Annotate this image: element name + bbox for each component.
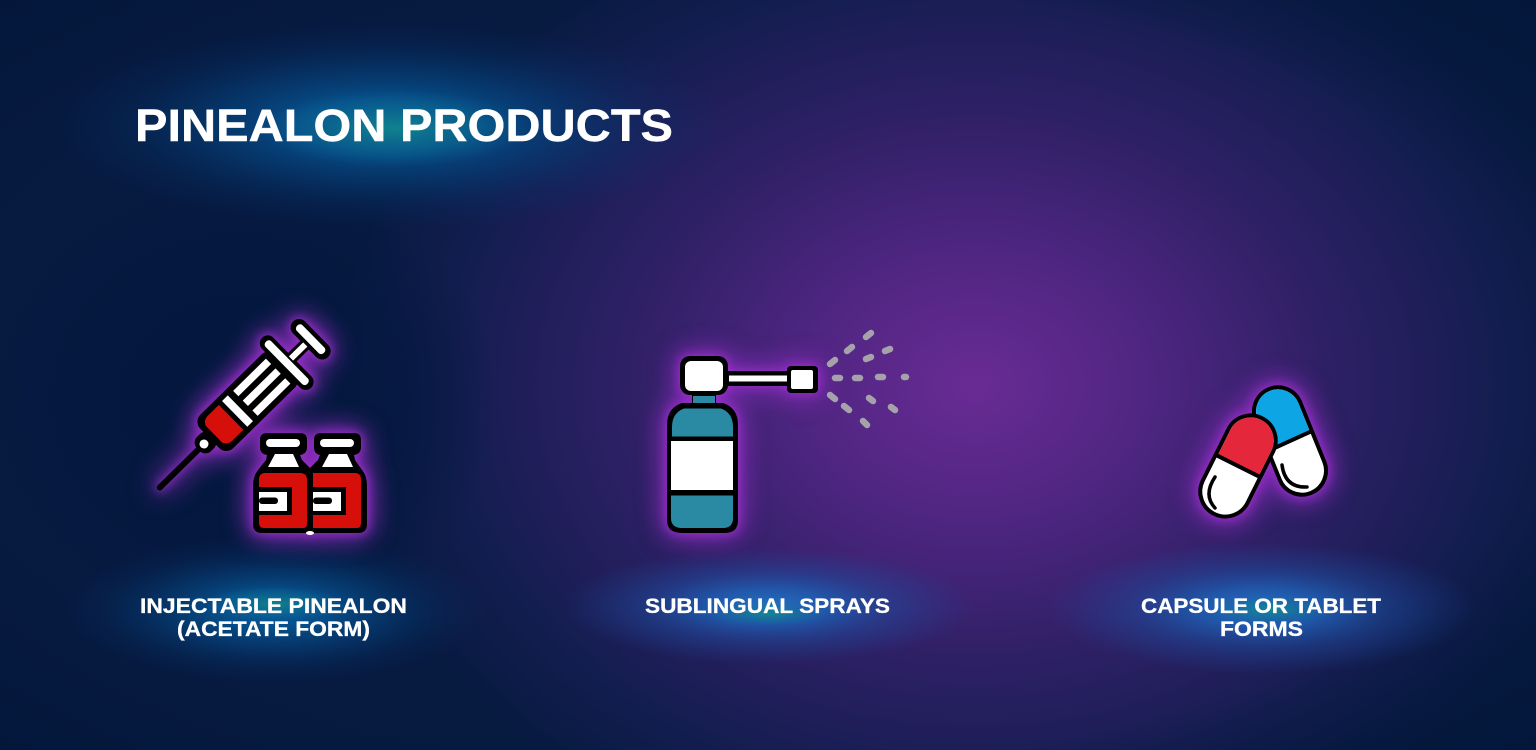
label: injectable pinealon — [140, 595, 407, 641]
label glow: sprays — [563, 548, 973, 664]
icon: syringe and vials — [135, 308, 367, 535]
spray bottle body — [667, 392, 738, 533]
label: capsule or tablet forms — [1141, 595, 1381, 641]
label: sublingual sprays: SUBLINGUAL SPRAYS — [645, 595, 890, 618]
icon: capsules — [1192, 380, 1333, 525]
capsule: red and white — [1192, 407, 1284, 525]
label glow: capsules — [1047, 542, 1477, 674]
label: capsule or tablet forms: CAPSULE OR TABLET — [1141, 595, 1381, 618]
label: capsule or tablet forms: FORMS — [1220, 618, 1303, 641]
title: PINEALON PRODUCTS — [135, 100, 673, 151]
icon: right vial — [306, 433, 367, 535]
icon: syringe — [135, 308, 341, 512]
label: injectable pinealon: (ACETATE FORM) — [177, 618, 370, 641]
icon: spray bottle — [667, 356, 818, 533]
spray nozzle — [680, 356, 818, 395]
label glow: injectable — [59, 535, 489, 685]
icon: left vial — [253, 433, 310, 533]
title glow core — [260, 90, 530, 166]
spray droplets — [830, 333, 906, 425]
capsule: blue and white — [1247, 380, 1333, 502]
title glow — [45, 20, 725, 230]
label: injectable pinealon: INJECTABLE PINEALON — [140, 595, 407, 618]
